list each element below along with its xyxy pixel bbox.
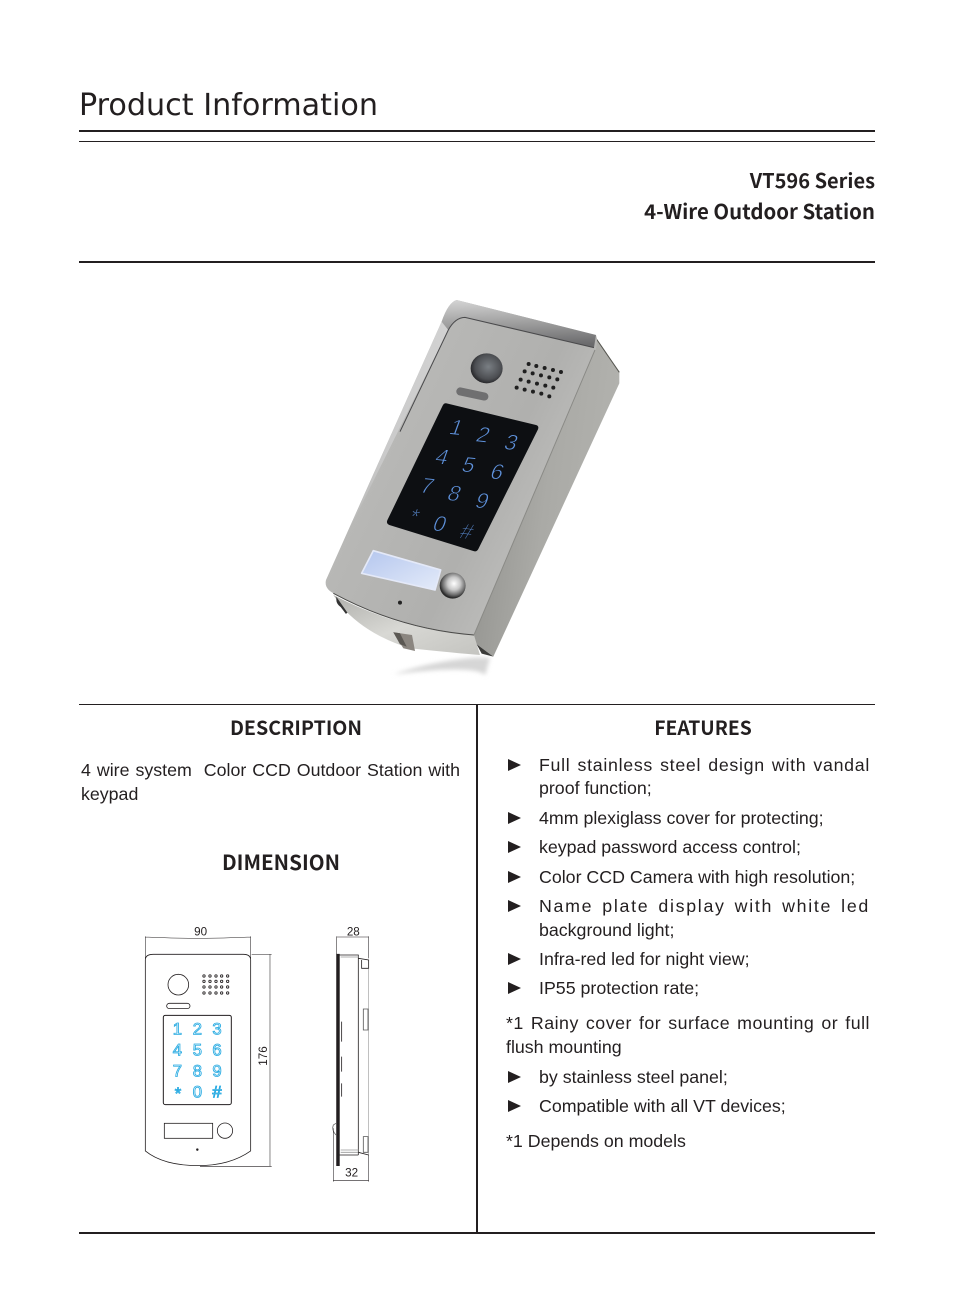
left rim [343,322,448,542]
product photo: outdoor station: 1 [446,415,467,440]
side face [472,338,619,657]
product photo: outdoor station: 0 [430,511,450,536]
features list: Full stainless steel design with vandal [539,755,870,775]
front view: 3 [212,1019,222,1038]
front view: 8 [193,1061,202,1080]
reflection [393,658,490,675]
product photo: outdoor station: 9 [472,488,493,513]
description text: 4 wire system Color CCD Outdoor Station with [81,760,460,780]
front view: # [212,1082,222,1101]
front view: 5 [193,1040,202,1059]
features list: by stainless steel panel; [539,1067,728,1087]
dimension labels: 176 [257,1046,270,1066]
dimension labels: 32 [345,1167,358,1180]
bottom edge [333,595,480,655]
product photo: outdoor station: 6 [487,459,508,484]
dimension heading: DIMENSION [222,846,340,876]
description heading: DESCRIPTION [230,712,362,741]
dimension labels: 90 [194,926,208,939]
dimension labels [194,926,360,1180]
features list [506,755,870,1151]
title: Product Information [79,88,378,123]
product photo: outdoor station: 5 [458,452,479,477]
front view: 6 [212,1040,222,1059]
front view [145,954,251,1166]
features list: background light; [539,920,674,940]
product photo: outdoor station: 7 [417,473,438,498]
camera [471,353,503,383]
front view: 7 [173,1061,182,1080]
front view: 1 [173,1019,182,1038]
call button [440,573,466,599]
name plate [362,551,441,590]
product series heading: VT596 Series [750,165,875,194]
front view: 4 [173,1040,182,1059]
front plate [326,300,597,635]
microphone hole [398,601,402,605]
product name heading: 4-Wire Outdoor Station [644,195,875,225]
features list: *1 Depends on models [506,1131,686,1151]
dimension labels: 28 [347,926,360,939]
side view [333,954,369,1166]
features heading: FEATURES [654,713,752,741]
description text [81,760,460,804]
front view: 0 [193,1082,202,1101]
features list: Color CCD Camera with high resolution; [539,867,855,887]
product photo: outdoor station: 4 [432,444,453,469]
features list: IP55 protection rate; [539,978,699,998]
product photo: outdoor station: 3 [501,430,522,455]
product photo: outdoor station [326,300,620,675]
features list: 4mm plexiglass cover for protecting; [539,808,824,828]
product photo: outdoor station: 2 [473,422,494,447]
speaker holes [515,362,563,398]
front view: 2 [193,1019,202,1038]
front view: * [175,1084,182,1103]
product photo: outdoor station: 8 [444,481,465,506]
infrared led [456,387,489,401]
features list: proof function; [539,778,652,798]
features list: Name plate display with white led [539,896,870,916]
product photo: outdoor station: # [456,519,478,544]
product photo: outdoor station: * [406,504,423,529]
features list: Infra-red led for night view; [539,949,750,969]
features list: keypad password access control; [539,837,801,857]
features list: *1 Rainy cover for surface mounting or full [506,1013,870,1033]
front view: 9 [212,1061,222,1080]
dimension lines [145,936,369,1182]
hood [442,300,596,348]
features list: Compatible with all VT devices; [539,1096,786,1116]
features list: flush mounting [506,1037,622,1057]
description text: keypad [81,784,138,804]
keypad [387,403,538,551]
